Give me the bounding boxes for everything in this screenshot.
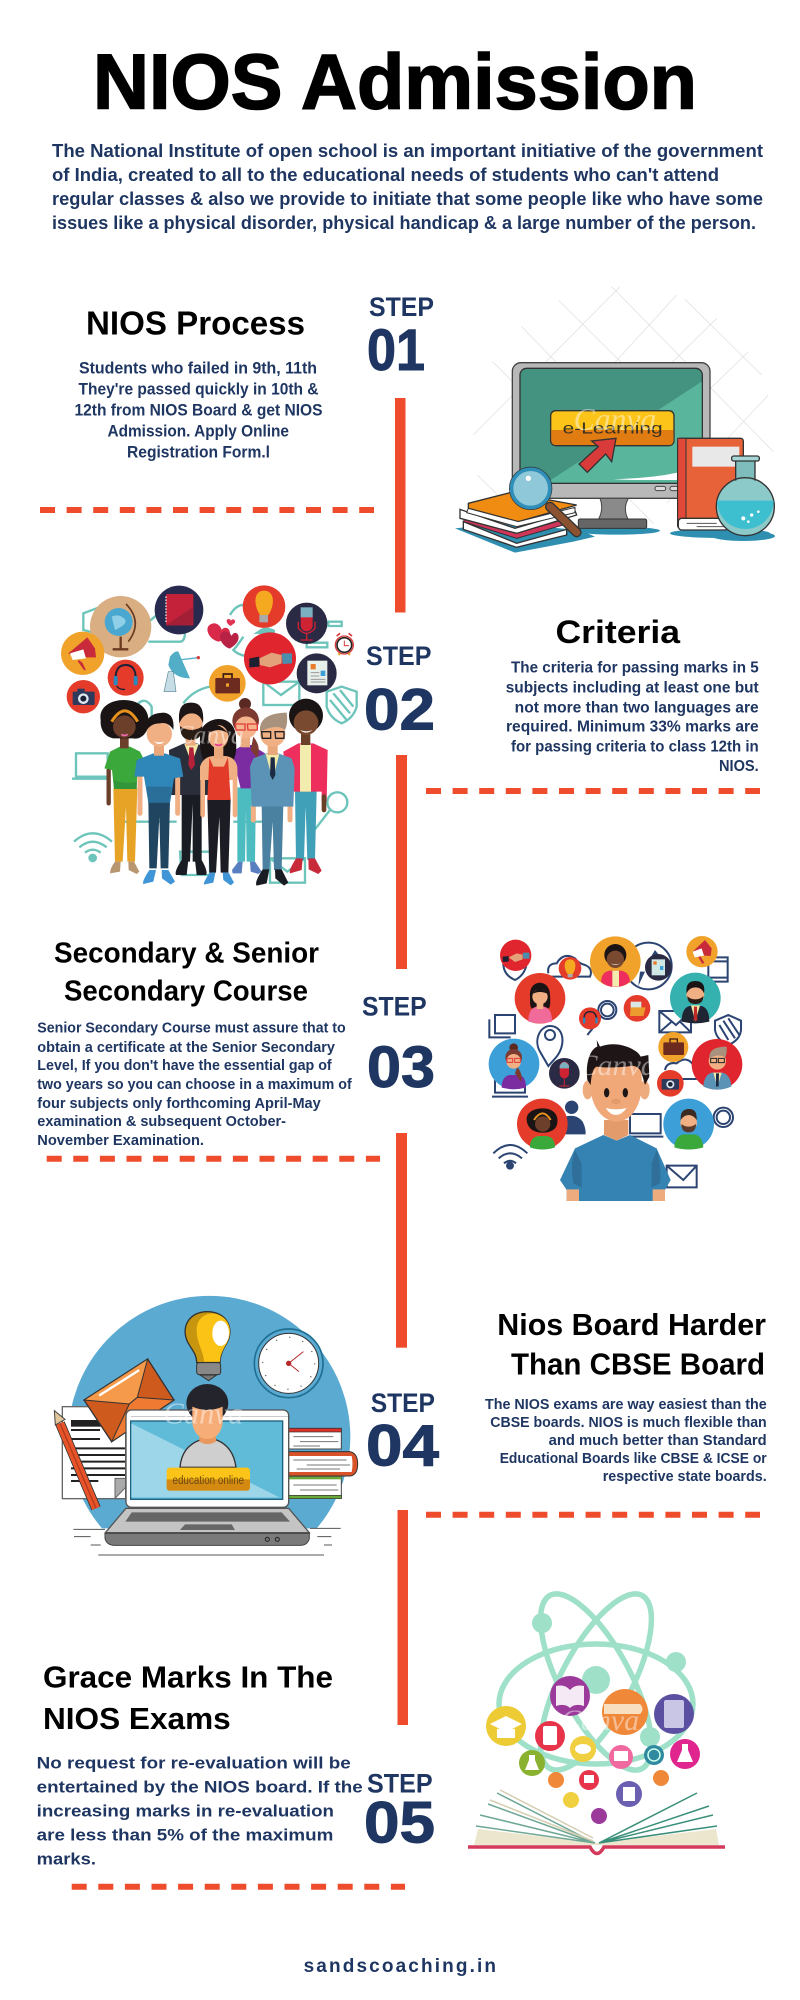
headset (108, 660, 144, 696)
headset circle (579, 1007, 601, 1029)
bulb circle (559, 957, 581, 980)
person 4: woman red top (200, 719, 237, 885)
step 3 text: Level, If you don't have the essential gap of (37, 1058, 332, 1074)
step 2 text: subjects including at least one but (506, 679, 759, 696)
avatar blue man (663, 1099, 714, 1149)
books (463, 522, 567, 547)
step 5 text: marks. (37, 1850, 96, 1869)
folder circle (624, 995, 650, 1022)
step 2 text: not more than two languages are (515, 699, 759, 716)
step 1 heading: NIOS Process (86, 304, 305, 342)
avatar woman pink (515, 973, 565, 1024)
person 2: blue shirt (134, 713, 183, 885)
step 3 label: STEP (362, 992, 427, 1022)
step 1 text: They're passed quickly in 10th & (78, 380, 319, 398)
step 5 text: are less than 5% of the maximum (37, 1826, 333, 1845)
step 4 heading: Than CBSE Board (511, 1346, 765, 1381)
step 1 text: Registration Form.l (127, 444, 270, 462)
illustration: atom and open book: Canva (561, 1704, 639, 1737)
step 2 heading: Criteria (556, 614, 680, 650)
step 1 text: Students who failed in 9th, 11th (79, 360, 317, 378)
avatar orange man (590, 936, 641, 987)
education online button (167, 1468, 250, 1491)
tan globe circle (90, 596, 151, 657)
step 3 heading: Secondary Course (64, 976, 308, 1008)
megaphone (61, 632, 104, 675)
illustration: man with avatar icons: Canva (578, 1049, 656, 1082)
teal outline icons (72, 605, 357, 883)
step 1 label: STEP (369, 292, 434, 322)
step 3 dashed divider (47, 1156, 380, 1162)
person 5: purple, back (232, 698, 265, 874)
vertical connector 4 (398, 1510, 408, 1725)
illustration: online education laptop: education online (172, 1473, 244, 1487)
step 1 text: 12th from NIOS Board & get NIOS (74, 402, 322, 420)
main man (560, 1135, 671, 1201)
intro paragraph: regular classes & also we provide to initiate that some people like who have some (52, 188, 763, 209)
step 5 text (37, 1753, 363, 1869)
illustration: online education laptop: Canva (163, 1396, 243, 1430)
step 4 heading: Nios Board Harder (497, 1307, 766, 1342)
illustration: e-learning monitor: e-Learning (563, 421, 663, 438)
hearts (207, 623, 230, 642)
envelope (84, 1359, 174, 1442)
intro paragraph: The National Institute of open school is an important initiative of the government (52, 140, 763, 161)
atom orbits (499, 1579, 693, 1785)
illustration: group of people with icons: Canva (176, 720, 244, 749)
step 1 label: 01 (367, 318, 425, 383)
step 5 text: increasing marks in re-evaluation (37, 1802, 334, 1821)
camera circle (657, 1070, 684, 1097)
step 4 text: The NIOS exams are way easiest than the (485, 1397, 767, 1413)
button (551, 411, 674, 446)
step 1 label (367, 292, 434, 383)
step 3 text: examination & subsequent October- (37, 1114, 286, 1130)
step 3 heading: Secondary & Senior (54, 938, 319, 970)
step 5 heading (43, 1660, 333, 1736)
step 3 text (37, 1021, 352, 1149)
handshake circle (500, 940, 531, 971)
laptop base (105, 1508, 309, 1533)
step 5 heading: Grace Marks In The (43, 1660, 333, 1695)
step 3 label (362, 992, 435, 1100)
pencil (60, 1423, 96, 1508)
navy outline icons (489, 943, 741, 1187)
person 3: suit, back (169, 703, 211, 875)
person 7: red jacket, back (283, 699, 328, 874)
step 5 dashed divider (72, 1884, 405, 1890)
illustration: group of people with icons (61, 585, 357, 886)
step 2 label (364, 641, 435, 743)
intro paragraph (52, 140, 763, 233)
paper (62, 1407, 126, 1499)
navy notebook (155, 586, 203, 634)
title: NIOS Admission (93, 38, 697, 126)
bulb (243, 585, 285, 628)
handshake (244, 632, 296, 684)
step 2 text: The criteria for passing marks in 5 (511, 659, 759, 676)
step 5 label (364, 1769, 435, 1856)
step 4 heading (497, 1307, 766, 1381)
illustration: e-learning monitor (455, 287, 775, 553)
step 5 text: No request for re-evaluation will be (37, 1753, 351, 1772)
doc (297, 653, 337, 693)
step 2 text: required. Minimum 33% marks are (506, 718, 759, 735)
step 3 text: obtain a certificate at the Senior Secondary (37, 1040, 335, 1056)
mic (286, 603, 327, 644)
magnifier (550, 507, 577, 532)
step 1 text (74, 360, 322, 462)
step 5 label: STEP (367, 1769, 433, 1799)
step 4 label: STEP (371, 1388, 435, 1418)
avatar blue woman (489, 1039, 539, 1089)
vertical connector 1 (395, 398, 406, 612)
step 3 heading (54, 938, 319, 1008)
bulb (185, 1312, 230, 1363)
step 4 text (485, 1397, 767, 1485)
vertical connector 3 (396, 1133, 407, 1348)
open book (474, 1829, 719, 1845)
step 4 dashed divider (426, 1512, 760, 1518)
step 4 text: respective state boards. (603, 1469, 767, 1485)
books (289, 1428, 341, 1449)
step 4 label (366, 1388, 439, 1479)
illustration: man with avatar icons (489, 936, 742, 1201)
step 3 text: two years so you can choose in a maximum of (37, 1077, 352, 1093)
monitor (512, 363, 710, 498)
step 4 text: CBSE boards. NIOS is much flexible than (490, 1415, 767, 1431)
avatar afro (517, 1099, 568, 1149)
laptop screen (126, 1410, 289, 1507)
step 2 dashed divider (426, 788, 760, 794)
person on screen (180, 1440, 236, 1467)
person 1: afro woman (100, 700, 149, 874)
step 3 text: Senior Secondary Course must assure that to (37, 1021, 346, 1037)
dish (168, 651, 190, 678)
step 3 text: four subjects only forthcoming April-May (37, 1096, 321, 1112)
blue circle (68, 1296, 350, 1528)
illustration: online education laptop (54, 1296, 358, 1555)
step 2 text (506, 659, 759, 775)
megaphone circle (686, 936, 718, 967)
briefcase (209, 665, 246, 702)
step 3 text: November Examination. (37, 1133, 204, 1149)
intro paragraph: of India, created to all to the educational needs of students who can't attend (52, 164, 719, 185)
step 2 text: for passing criteria to class 12th in (511, 738, 759, 755)
illustration: atom and open book (468, 1579, 725, 1854)
briefcase circle (658, 1032, 688, 1062)
step 4 text: Educational Boards like CBSE & ICSE or (500, 1451, 767, 1467)
vertical connector 2 (396, 755, 407, 969)
avatar teal man (670, 973, 721, 1023)
camera (67, 680, 100, 713)
step 1 dashed divider (40, 507, 374, 513)
step 5 text: entertained by the NIOS board. If the (37, 1778, 363, 1797)
step 5 heading: NIOS Exams (43, 1701, 231, 1736)
intro paragraph: issues like a physical disorder, physical handicap & a large number of the person. (52, 212, 756, 233)
flask (736, 460, 755, 483)
step 5 label: 05 (364, 1791, 435, 1856)
illustration: e-learning monitor: Canva (574, 402, 656, 437)
icon circles (550, 1676, 590, 1716)
doc circle (645, 954, 672, 981)
footer website: sandscoaching.in (304, 1956, 496, 1977)
step 3 label: 03 (367, 1035, 435, 1100)
clock (254, 1329, 323, 1398)
shadows (455, 523, 595, 553)
mic circle (549, 1058, 580, 1089)
step 2 label: 02 (364, 678, 435, 743)
avatar red man (692, 1039, 742, 1090)
step 4 label: 04 (366, 1414, 439, 1479)
red book (678, 438, 743, 528)
alarm clock (337, 638, 352, 652)
step 1 text: Admission. Apply Online (108, 422, 289, 440)
step 2 text: NIOS. (719, 758, 759, 775)
person 6: man blue suit (250, 713, 295, 886)
step 4 text: and much better than Standard (549, 1433, 767, 1449)
step 2 label: STEP (366, 641, 432, 671)
arrow (579, 438, 616, 472)
